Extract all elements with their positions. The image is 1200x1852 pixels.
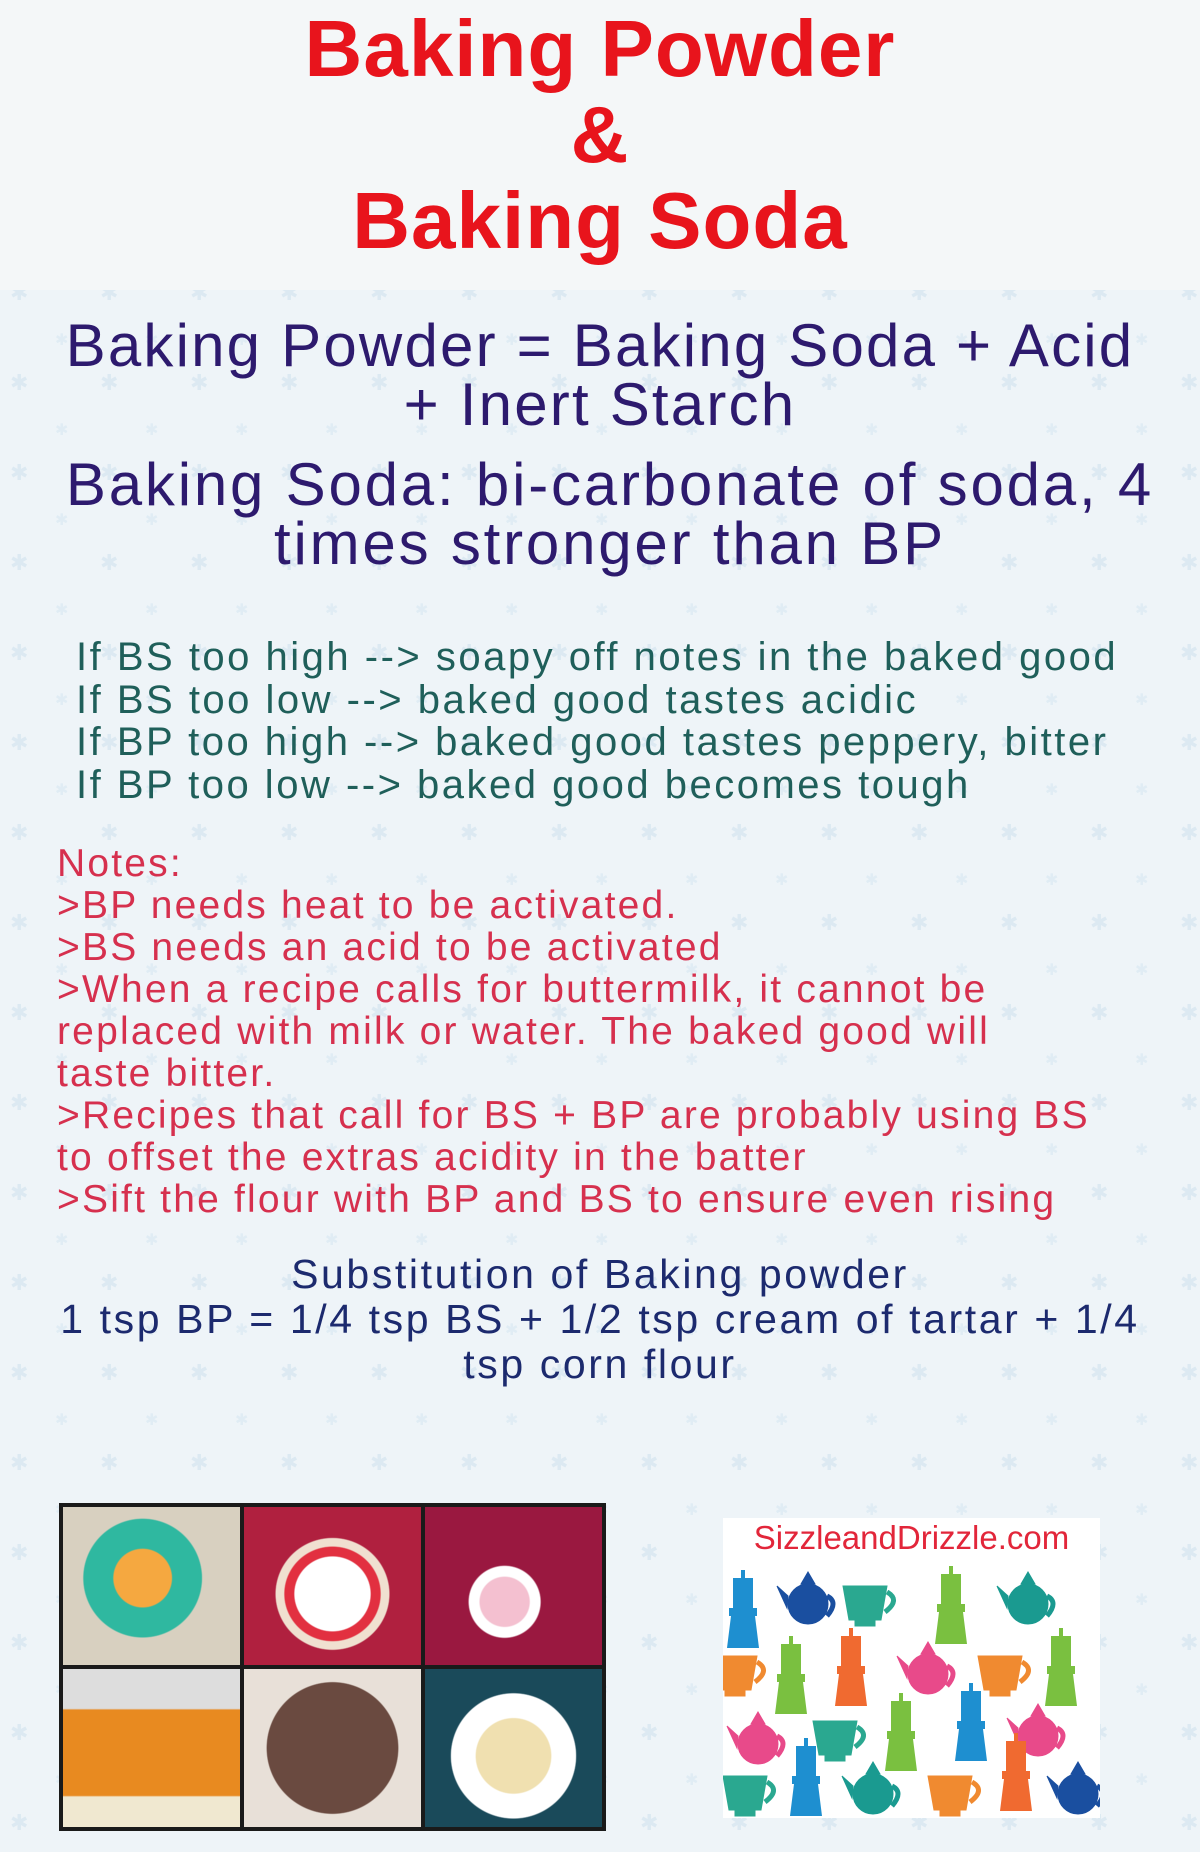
effects list: If BS too low --> baked good tastes acidic	[76, 678, 918, 722]
title: Baking Powder	[305, 4, 895, 93]
logo box	[723, 1518, 1100, 1818]
notes: >When a recipe calls for buttermilk, it cannot be	[57, 968, 987, 1011]
substitution: 1 tsp BP = 1/4 tsp BS + 1/2 tsp cream of tartar + 1/4	[60, 1296, 1140, 1342]
notes: taste bitter.	[57, 1052, 276, 1095]
notes: >BS needs an acid to be activated	[57, 926, 723, 969]
definition: baking soda: times stronger than BP	[274, 510, 946, 577]
title: &	[571, 90, 629, 179]
notes	[57, 842, 1090, 1221]
substitution: tsp corn flour	[463, 1341, 737, 1387]
definition: baking powder	[66, 312, 1134, 438]
notes: >BP needs heat to be activated.	[57, 884, 678, 927]
title: Baking Soda	[352, 176, 848, 265]
effects list: If BP too low --> baked good becomes tough	[76, 762, 971, 806]
notes: >Sift the flour with BP and BS to ensure even rising	[57, 1178, 1056, 1221]
definition: baking soda: Baking Soda: bi-carbonate of soda, 4	[66, 451, 1154, 518]
title	[305, 4, 895, 265]
photo grid	[59, 1503, 606, 1831]
effects list: If BS too high --> soapy off notes in the baked good	[76, 635, 1118, 679]
substitution: Substitution of Baking powder	[291, 1251, 909, 1297]
definition: baking soda	[66, 451, 1154, 577]
logo text: SizzleandDrizzle.com	[754, 1519, 1069, 1556]
effects list: If BP too high --> baked good tastes peppery, bitter	[76, 720, 1108, 764]
notes: to offset the extras acidity in the batter	[57, 1136, 808, 1179]
teapot pattern	[723, 1566, 1100, 1816]
effects list	[76, 635, 1118, 806]
notes: replaced with milk or water. The baked good will	[57, 1010, 990, 1053]
definition: baking powder: + Inert Starch	[404, 371, 796, 438]
notes: >Recipes that call for BS + BP are probably using BS	[57, 1094, 1090, 1137]
notes: Notes:	[57, 842, 183, 885]
definition: baking powder: Baking Powder = Baking Soda + Acid	[66, 312, 1134, 379]
substitution	[60, 1251, 1140, 1387]
